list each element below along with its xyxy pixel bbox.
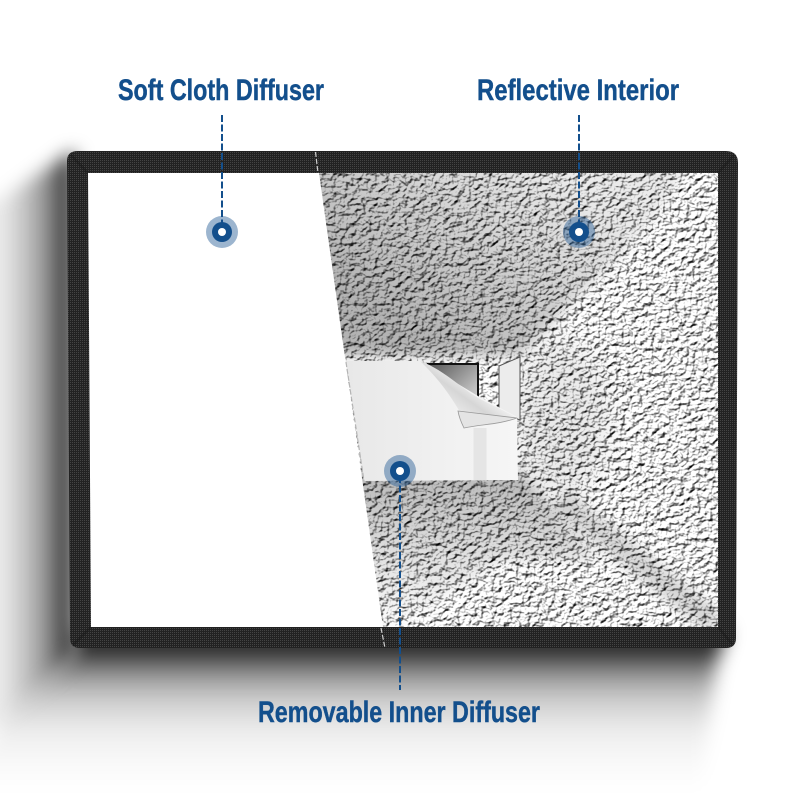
panel: reflective interior xyxy=(319,173,718,627)
interior shading: top wall xyxy=(319,173,686,363)
sheet stitched edge xyxy=(346,362,364,481)
marker xyxy=(384,455,416,487)
interior shading: seam bottom right xyxy=(560,500,716,624)
heading: Removable Inner Diffuser xyxy=(258,696,540,729)
opening in the back of the softbox xyxy=(428,364,478,410)
dashed leader line xyxy=(399,476,401,690)
interior shading: centre glow xyxy=(510,340,610,500)
marker xyxy=(206,216,238,248)
marker xyxy=(563,216,595,248)
corner mitres xyxy=(71,155,734,645)
seam stitches xyxy=(316,152,385,648)
callout: removable inner diffuser xyxy=(258,455,540,729)
inner diffuser sheet xyxy=(346,361,518,481)
heading: Soft Cloth Diffuser xyxy=(118,74,324,107)
heading: Reflective Interior xyxy=(477,74,679,107)
peeled corner xyxy=(420,361,517,418)
drop shadow xyxy=(0,150,728,800)
dashed leader line xyxy=(578,115,580,226)
folded tip xyxy=(458,411,517,428)
softbox frame xyxy=(67,151,738,648)
callout: soft cloth diffuser xyxy=(118,74,324,248)
far right baffle flap xyxy=(499,357,520,420)
dashed leader line xyxy=(221,115,223,226)
sheet seam xyxy=(474,428,486,480)
panel: soft cloth diffuser xyxy=(88,173,383,627)
interior shading: lower left wall xyxy=(360,464,596,612)
foil texture xyxy=(319,173,718,627)
callout: reflective interior xyxy=(477,74,679,248)
panel: removable inner diffuser xyxy=(346,357,520,481)
